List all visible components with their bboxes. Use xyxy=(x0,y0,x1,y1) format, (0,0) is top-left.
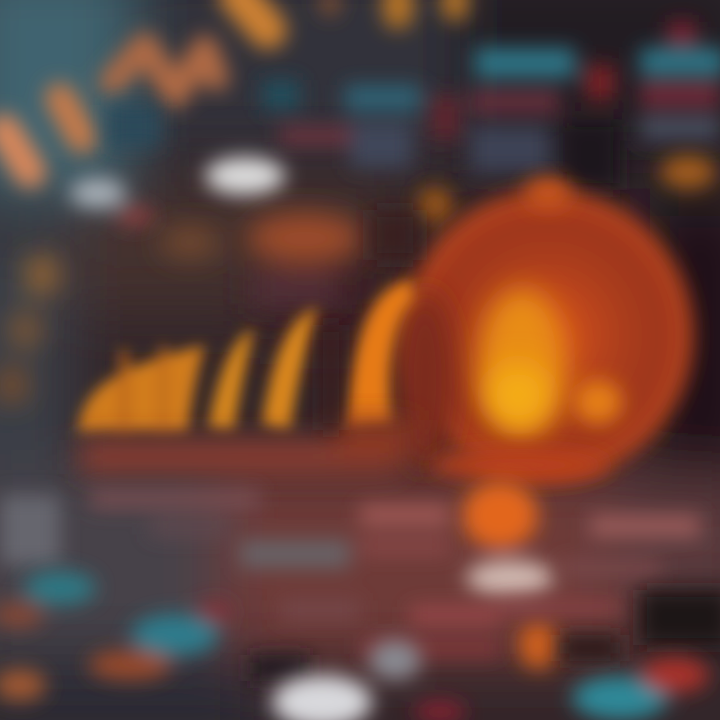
dark gaps xyxy=(322,210,420,430)
coin right spark xyxy=(574,380,622,424)
red glow under coins xyxy=(80,420,415,474)
glowing coin xyxy=(395,177,694,481)
mid muted orange blocks xyxy=(0,212,363,405)
coin lower shade xyxy=(430,449,610,481)
coin top nub xyxy=(524,177,572,209)
stacked coins row xyxy=(78,280,414,435)
coin left shade xyxy=(395,290,455,470)
coin centre glow xyxy=(478,288,566,436)
coin yellow core xyxy=(486,363,550,427)
white highlights upper left xyxy=(70,155,716,226)
white blob bottom xyxy=(272,640,466,720)
dark shapes lower right xyxy=(250,590,720,681)
coin base reflection xyxy=(462,481,558,669)
teal blobs lower xyxy=(0,571,709,720)
coin outer glow xyxy=(402,189,694,481)
teal chart panels upper right xyxy=(108,22,720,190)
reflected streaks lower xyxy=(0,490,700,656)
orange zigzag trend line xyxy=(4,0,455,172)
